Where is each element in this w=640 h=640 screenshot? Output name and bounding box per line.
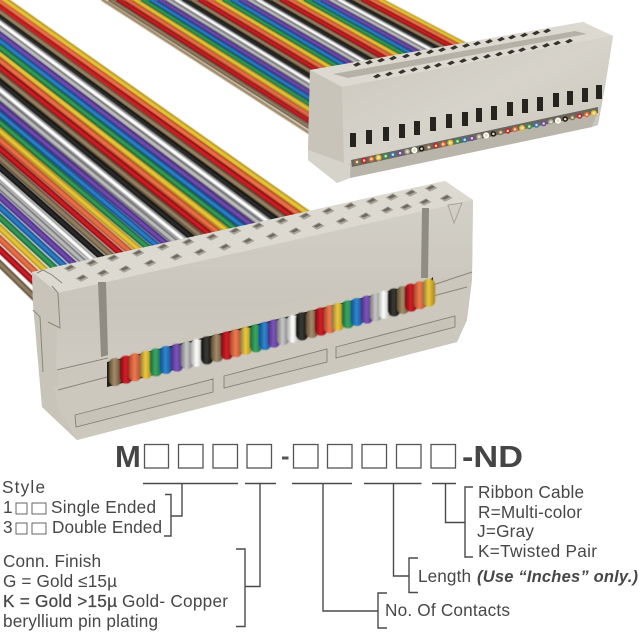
right vertical slit — [421, 208, 429, 278]
part number blank boxes — [144, 444, 456, 468]
recessed label panels — [75, 316, 455, 427]
number of contacts legend: No. Of Contacts — [385, 600, 510, 620]
rear connector pin holes — [353, 28, 573, 78]
rear connector wire slot — [351, 107, 598, 167]
style legend: Double Ended — [52, 517, 162, 537]
connector finish legend: Gold- Copper — [122, 591, 228, 611]
front connector body — [32, 181, 473, 440]
part number suffix -ND: -ND — [462, 439, 523, 474]
front connector — [32, 181, 473, 440]
rear connector wire ends — [355, 111, 596, 164]
rear connector top groove — [333, 31, 587, 78]
polarity triangle mark — [448, 203, 462, 223]
connector finish legend: K = Gold >15µ — [3, 591, 117, 611]
front connector front panel — [56, 200, 473, 372]
left vertical slit — [98, 282, 108, 357]
length legend — [418, 566, 638, 586]
length legend: (Use “Inches” only.) — [477, 568, 638, 586]
front connector pin holes — [64, 184, 452, 282]
style legend: 1 — [3, 497, 13, 517]
rear connector bottom-left lip — [308, 150, 350, 183]
connector finish legend — [3, 551, 228, 631]
connector finish legend: G = Gold ≤15µ — [3, 571, 117, 591]
rear connector left side — [308, 70, 344, 165]
part number heading — [115, 439, 523, 474]
length legend: Length — [418, 566, 471, 586]
ribbon cable legend: R=Multi-color — [478, 502, 582, 522]
front connector edge lines — [33, 270, 472, 390]
lower ribbon cable — [0, 0, 310, 303]
ribbon cable legend: J=Gray — [477, 521, 534, 541]
part number dash — [282, 456, 288, 460]
rear connector lower strip — [350, 110, 598, 178]
style legend: 3 — [3, 517, 13, 537]
rear connector top face — [310, 22, 613, 87]
ribbon cable legend: K=Twisted Pair — [478, 541, 597, 561]
rear connector front face — [342, 36, 613, 165]
front connector lower band — [53, 287, 467, 440]
coloured wire cross-sections — [109, 279, 435, 386]
connector lines — [143, 484, 473, 628]
style legend — [2, 477, 162, 537]
front connector left side — [32, 272, 77, 440]
connector window opening — [107, 277, 434, 387]
upper ribbon cable — [103, 0, 490, 147]
ribbon cable legend — [477, 482, 597, 561]
connector finish legend: beryllium pin plating — [3, 611, 158, 631]
ribbon cable legend: Ribbon Cable — [478, 482, 584, 502]
style legend: Style — [2, 477, 45, 497]
front connector top face — [32, 181, 473, 293]
style legend: Single Ended — [51, 497, 156, 517]
rear connector — [308, 22, 613, 183]
rear connector window slits — [350, 85, 602, 147]
connector finish legend: Conn. Finish — [3, 551, 101, 571]
part number prefix M: M — [115, 439, 141, 474]
rear connector body — [308, 22, 613, 183]
